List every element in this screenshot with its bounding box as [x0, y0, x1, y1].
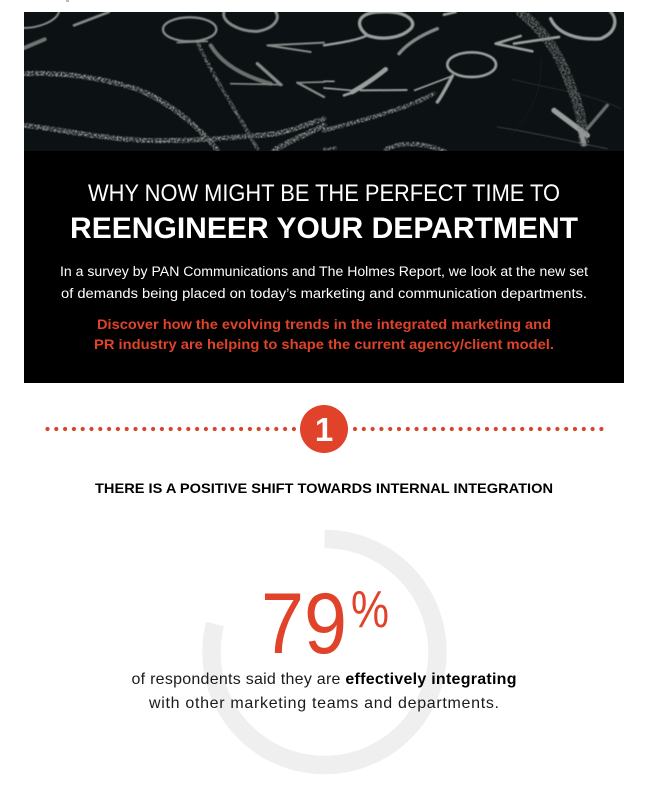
number badge 1 [300, 405, 348, 453]
panel: chalkboard header image [24, 12, 624, 152]
chalk play diagram: right solid strokes [324, 12, 621, 149]
heading line 2: REENGINEER YOUR DEPARTMENT [70, 212, 578, 245]
section heading: THERE IS A POSITIVE SHIFT TOWARDS INTERNAL INTEGRATION [95, 480, 553, 496]
ring chart: 79 percent [211, 539, 437, 765]
intro paragraph: In a survey by PAN Communications and The Holmes Report, we look at the new set [60, 264, 588, 279]
panel: black intro block [24, 151, 624, 383]
dotted divider with number badge [48, 405, 603, 453]
red call to action text: Discover how the evolving trends in the integrated marketing and [97, 316, 551, 332]
statistic description: of respondents said they are effectively integrating [132, 671, 516, 688]
statistic 79%: 79 [261, 576, 347, 672]
chalk play diagram: left solid strokes [24, 12, 621, 149]
statistic description [132, 671, 516, 712]
chalk play diagram: dusty strokes [24, 12, 584, 152]
number badge 1: 1 [315, 411, 333, 448]
small mark at top edge [66, 0, 69, 2]
red call to action text [94, 316, 554, 352]
statistic description: with other marketing teams and departments. [148, 695, 499, 712]
red call to action text: PR industry are helping to shape the current agency/client model. [94, 336, 554, 352]
heading line 1: WHY NOW MIGHT BE THE PERFECT TIME TO [88, 180, 560, 207]
statistic 79%: % [351, 581, 389, 639]
intro paragraph [60, 264, 588, 301]
intro paragraph: of demands being placed on today’s marketing and communication departments. [61, 286, 587, 301]
